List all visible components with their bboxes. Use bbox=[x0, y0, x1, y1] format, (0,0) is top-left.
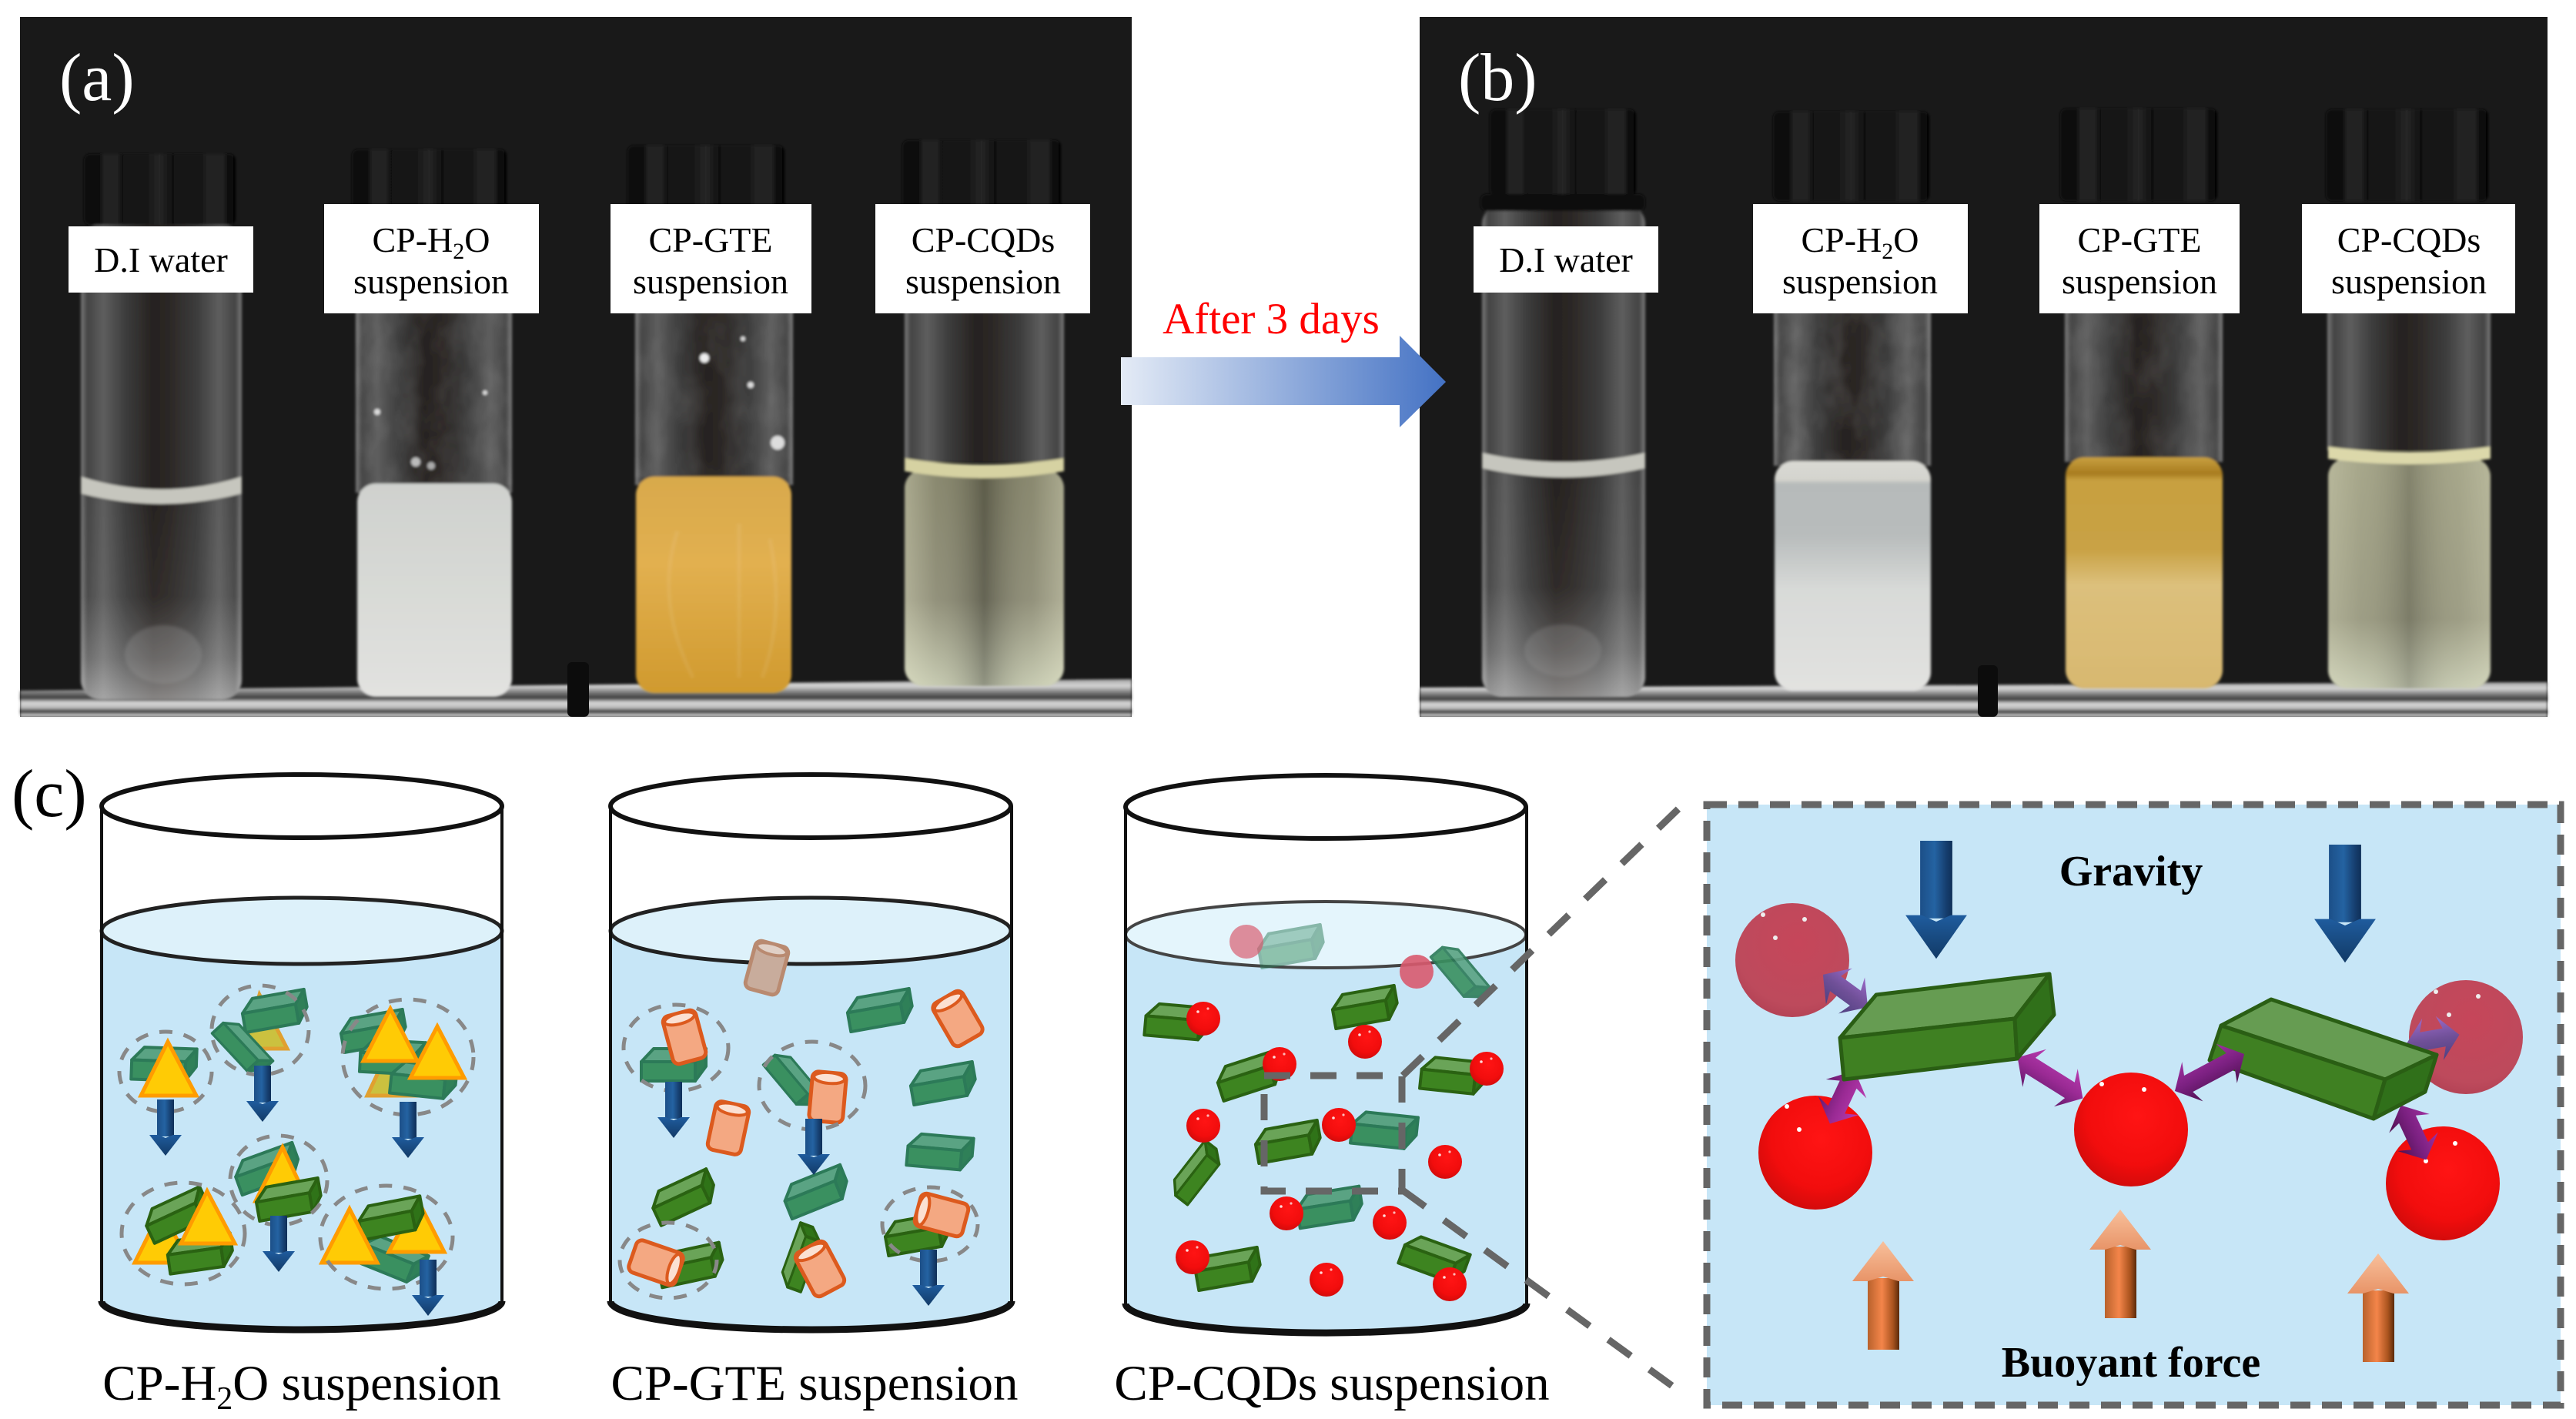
vial: CP-H2O suspension (a) bbox=[352, 149, 512, 697]
right green block bbox=[2210, 999, 2437, 1119]
vial: CP-H2O suspension (b) bbox=[1773, 112, 1931, 691]
label: CP-CQDs suspension: suspension bbox=[905, 262, 1061, 301]
label: D.I water bbox=[1474, 226, 1658, 293]
label: CP-H2O suspension: CP-H bbox=[1801, 220, 1882, 259]
label: D.I water: D.I water bbox=[94, 240, 228, 279]
caption: CP-H2O suspension: O suspension bbox=[233, 1356, 501, 1411]
zoom lines to inset bbox=[1403, 802, 1689, 1398]
label: D.I water bbox=[69, 226, 253, 293]
label: CP-CQDs suspension: CP-CQDs bbox=[2337, 220, 2481, 259]
label: CP-H2O suspension bbox=[1753, 204, 1968, 313]
interaction arrows beneath blocks bbox=[1810, 956, 2464, 1170]
rail under the vials in panel b bbox=[1420, 682, 2548, 717]
label: CP-GTE suspension: suspension bbox=[2062, 262, 2217, 301]
label: CP-GTE suspension bbox=[2039, 204, 2240, 313]
buoyant force arrows bbox=[1852, 1210, 2409, 1362]
label: CP-CQDs suspension: suspension bbox=[2331, 262, 2487, 301]
panel (b): photo of four vials after 3 days bbox=[1420, 17, 2548, 717]
clamp stub in panel a bbox=[567, 662, 589, 717]
panel (a): photo of four vials before storage bbox=[20, 17, 1132, 717]
label: CP-H2O suspension: O bbox=[1893, 220, 1919, 259]
label: CP-H2O suspension: 2 bbox=[453, 239, 464, 264]
caption: CP-GTE suspension: CP-GTE suspension bbox=[611, 1356, 1019, 1411]
label: CP-GTE suspension bbox=[611, 204, 811, 313]
vial: D.I water (b) bbox=[1480, 109, 1645, 697]
beaker: CP-CQDs suspension bbox=[1126, 775, 1527, 1333]
vial: CP-CQDs suspension (b) bbox=[2326, 109, 2491, 688]
panel letter (b): (b) bbox=[1458, 41, 1537, 115]
heading: gravity: Gravity bbox=[2059, 848, 2203, 895]
label: CP-H2O suspension: suspension bbox=[353, 262, 509, 301]
gravity arrows bbox=[657, 1082, 945, 1306]
caption: CP-H2O suspension: 2 bbox=[216, 1381, 233, 1417]
caption: CP-H2O suspension: CP-H bbox=[102, 1356, 216, 1411]
particles and dashed clusters bbox=[119, 986, 473, 1289]
label: CP-H2O suspension: 2 bbox=[1882, 239, 1893, 264]
inset: force diagram bbox=[1707, 805, 2561, 1405]
rail under the vials in panel a bbox=[20, 679, 1132, 717]
heading: buoyant force: Buoyant force bbox=[2002, 1339, 2260, 1387]
label: CP-GTE suspension: CP-GTE bbox=[648, 220, 773, 259]
label: CP-CQDs suspension bbox=[875, 204, 1090, 313]
vial: CP-GTE suspension (b) bbox=[2060, 109, 2223, 688]
caption: CP-CQDs suspension: CP-CQDs suspension bbox=[1114, 1356, 1550, 1411]
arrow: after 3 days bbox=[1121, 295, 1446, 427]
solid red spheres bbox=[1758, 1073, 2500, 1240]
left green block bbox=[1840, 974, 2054, 1079]
label: CP-GTE suspension: suspension bbox=[633, 262, 788, 301]
beaker: CP-H2O suspension bbox=[102, 775, 502, 1330]
interaction arrow over right block bbox=[2164, 1034, 2255, 1111]
vial: D.I water (a) bbox=[81, 154, 242, 700]
panel letter (c): (c) bbox=[12, 757, 87, 832]
particles and dashed clusters bbox=[620, 939, 985, 1299]
label: CP-H2O suspension: CP-H bbox=[372, 220, 453, 259]
faded spheres bbox=[1735, 903, 2523, 1094]
label: CP-CQDs suspension bbox=[2302, 204, 2515, 313]
label: CP-GTE suspension: CP-GTE bbox=[2077, 220, 2202, 259]
vial: CP-CQDs suspension (a) bbox=[902, 140, 1064, 686]
gravity arrows bbox=[149, 1066, 444, 1316]
beaker: CP-GTE suspension bbox=[611, 775, 1012, 1330]
particles: green blocks and red quantum dots bbox=[1144, 925, 1504, 1301]
clamp stub in panel b bbox=[1978, 665, 1998, 717]
arrow: after 3 days: After 3 days bbox=[1163, 295, 1380, 343]
label: CP-H2O suspension: O bbox=[464, 220, 490, 259]
label: CP-CQDs suspension: CP-CQDs bbox=[912, 220, 1055, 259]
panel letter (a): (a) bbox=[59, 41, 135, 115]
gravity arrows in inset bbox=[1905, 841, 2376, 962]
vial: CP-GTE suspension (a) bbox=[627, 146, 793, 693]
label: D.I water: D.I water bbox=[1499, 240, 1633, 279]
dashed zoom box bbox=[1264, 1076, 1402, 1191]
label: CP-H2O suspension bbox=[324, 204, 539, 313]
label: CP-H2O suspension: suspension bbox=[1782, 262, 1938, 301]
